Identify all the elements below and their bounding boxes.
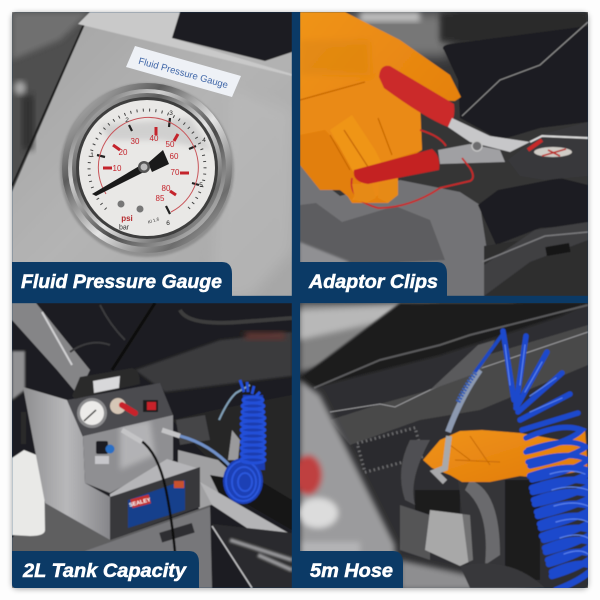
caption: tank capacity: 2L Tank Capacity <box>22 560 187 582</box>
black bar scale numbers: 5 <box>199 182 203 189</box>
black hose <box>140 440 175 552</box>
carry handle <box>72 368 140 399</box>
red psi scale numbers: 80 <box>162 184 171 193</box>
red wire <box>352 130 473 208</box>
panel: tank capacity <box>12 303 292 588</box>
black bar scale numbers <box>90 110 206 227</box>
dial ticks <box>89 110 205 209</box>
caption: fluid pressure gauge: Fluid Pressure Gauge <box>21 271 222 293</box>
hood strut and background <box>12 303 292 400</box>
hose clamp and clear tube <box>435 335 502 482</box>
blue product label <box>128 480 185 528</box>
caption: hose <box>300 551 403 588</box>
red clip lower handle <box>354 149 439 184</box>
black bar scale numbers: 2 <box>125 117 129 124</box>
unit labels: Kl 1.6 <box>147 216 160 225</box>
machine side <box>23 387 110 540</box>
upper steel band <box>78 12 292 76</box>
car engine bay <box>172 395 292 588</box>
caption: hose: 5m Hose <box>310 560 393 582</box>
red psi scale numbers: 85 <box>156 194 165 203</box>
windscreen <box>300 303 520 372</box>
machine tray <box>110 459 200 497</box>
black bar scale numbers: 1 <box>90 152 94 159</box>
orange glove <box>423 428 588 482</box>
pressure gauge <box>60 83 234 257</box>
gauge name sticker <box>126 46 241 97</box>
blue product label: SEALEY <box>129 497 152 509</box>
table surface <box>12 503 212 588</box>
silver fitting <box>122 430 180 442</box>
dark background behind unit <box>12 12 90 192</box>
black battery cover <box>443 26 588 140</box>
caption: adaptor clips <box>300 262 447 296</box>
unit labels: psi <box>121 214 133 223</box>
blue coil hose <box>503 331 594 590</box>
red psi scale numbers: 70 <box>171 168 180 177</box>
panel: hose <box>294 303 594 590</box>
mesh grille <box>357 428 423 472</box>
black bar scale numbers: 3 <box>169 110 173 117</box>
blurred foreground machine <box>294 380 395 588</box>
caption: tank capacity <box>12 551 199 588</box>
red pressure arc <box>98 117 198 212</box>
caption: fluid pressure gauge <box>12 262 232 296</box>
needle <box>92 150 169 196</box>
red switch <box>143 400 158 412</box>
black scale markers <box>97 118 199 214</box>
red clip upper handle <box>379 66 454 127</box>
red scale markers <box>103 127 189 195</box>
dark central engine block <box>478 178 588 245</box>
orange glove <box>300 12 461 203</box>
steel highlight <box>220 108 292 296</box>
cowl panels <box>314 305 588 445</box>
blue knob <box>96 441 114 454</box>
unit labels <box>119 215 160 230</box>
red psi scale numbers: 30 <box>131 137 140 146</box>
panel: adaptor clips <box>300 12 588 296</box>
white fluid bottle <box>12 412 45 536</box>
blue hose connection <box>180 436 232 468</box>
control panel <box>67 383 173 436</box>
metal jaws <box>438 118 530 164</box>
red valve <box>110 398 135 414</box>
black bar scale numbers: 4 <box>202 137 206 144</box>
engine parts <box>400 440 545 590</box>
unit labels: bar <box>119 224 130 232</box>
battery top with sticker <box>526 134 588 180</box>
red psi scale numbers: 50 <box>166 140 175 149</box>
red psi scale numbers <box>113 134 180 203</box>
glove fingertips <box>352 180 398 203</box>
caption: adaptor clips: Adaptor Clips <box>308 271 438 293</box>
blue coil hose <box>219 380 265 504</box>
black handle <box>172 12 292 61</box>
red psi scale numbers: 20 <box>119 148 128 157</box>
blurred engine background <box>350 12 450 57</box>
small gauge <box>77 398 107 428</box>
panel: fluid pressure gauge <box>12 12 292 296</box>
red psi scale numbers: 10 <box>113 164 122 173</box>
plastic housing bottom left <box>300 165 494 296</box>
silver car panel <box>177 449 228 510</box>
red psi scale numbers: 40 <box>150 134 159 143</box>
red psi scale numbers: 60 <box>170 152 179 161</box>
machine unit <box>23 368 200 540</box>
gauge name sticker: Fluid Pressure Gauge <box>137 56 229 91</box>
machine front face <box>83 415 173 493</box>
black bar scale numbers: 6 <box>166 220 170 227</box>
